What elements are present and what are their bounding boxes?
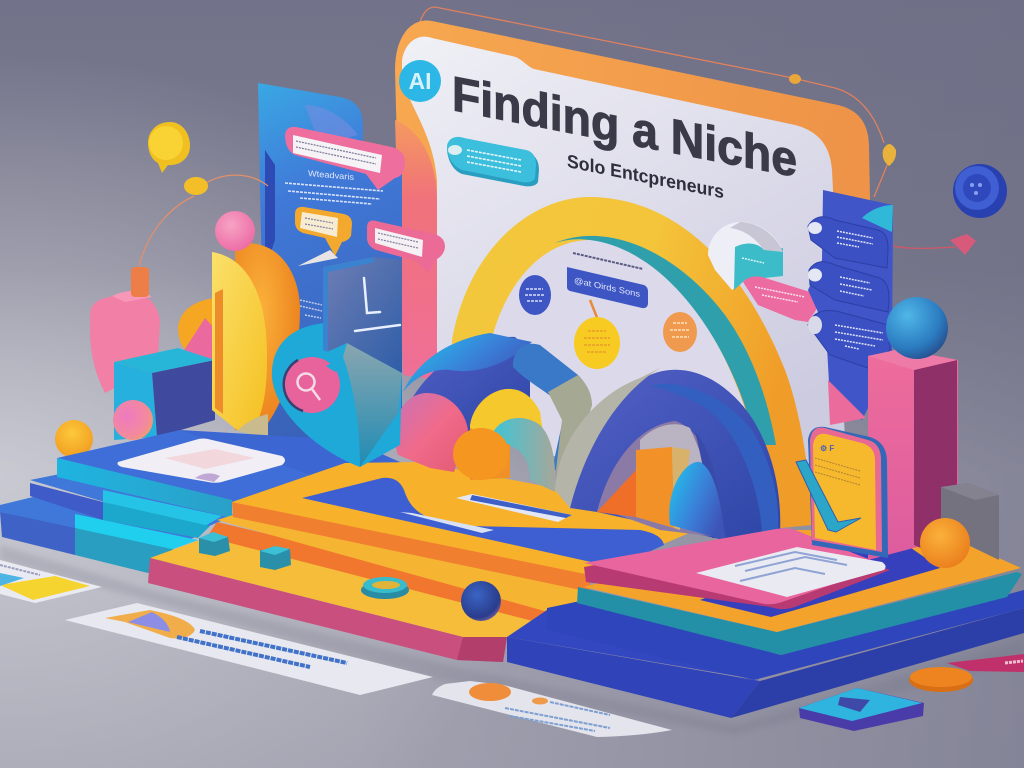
middle step — [30, 474, 235, 538]
subtitle: Solo Entcpreneurs — [567, 150, 724, 202]
connector line with nodes — [420, 7, 896, 197]
pink speech bubble top — [285, 127, 405, 190]
note icon: ⚙ F — [820, 444, 834, 453]
pink speech bubble right — [367, 221, 445, 273]
orange cylinder — [453, 428, 510, 480]
arch white interior — [490, 240, 770, 510]
arch note (illegible in the reference) — [573, 253, 643, 269]
floor card banner — [65, 603, 433, 695]
cyan callout — [447, 137, 539, 186]
cyan dome — [669, 462, 725, 540]
orange circle — [663, 312, 697, 352]
orange ball — [55, 420, 93, 458]
bottom yellow tier — [150, 535, 545, 637]
orange box — [597, 447, 690, 530]
pink ball — [113, 400, 153, 440]
yellow chat icon — [148, 122, 190, 173]
white note card — [118, 438, 285, 483]
orange sphere — [920, 518, 970, 568]
blue label — [567, 267, 648, 308]
blue tube — [513, 344, 592, 470]
yellow note with check mark — [796, 427, 888, 558]
teal arch — [490, 418, 555, 492]
gray block — [941, 483, 999, 560]
teal token two — [260, 546, 291, 570]
blue button — [953, 164, 1007, 218]
teal token three — [361, 577, 409, 599]
blue bubble two — [808, 262, 889, 312]
pink front face — [148, 558, 507, 662]
floor shadow — [0, 545, 1024, 735]
cyan wave — [403, 333, 532, 392]
top step — [57, 430, 400, 518]
bottom step — [0, 497, 200, 573]
pink bubble — [743, 277, 817, 322]
blue bubble one — [808, 217, 888, 268]
pink tablet — [584, 528, 890, 609]
panel heading: Wteadvaris — [308, 168, 354, 182]
right platform stack — [507, 528, 1024, 718]
blue bubble three — [808, 311, 890, 368]
blue back arch — [403, 337, 530, 440]
teal slab — [577, 572, 1022, 655]
white sheet — [696, 547, 886, 597]
teal token one — [199, 532, 230, 556]
note lines — [815, 458, 860, 485]
wave white label — [456, 494, 572, 522]
title: Finding a Niche — [452, 66, 797, 188]
cube — [114, 348, 215, 440]
left blue platform stack — [0, 430, 400, 573]
board frame — [395, 20, 870, 420]
check mark — [796, 460, 861, 532]
glowing L box with search heart — [272, 257, 402, 467]
teal facet — [343, 343, 402, 467]
arches group — [395, 333, 780, 540]
search badge — [284, 357, 342, 413]
white and teal bubble — [708, 222, 783, 290]
pink dome — [395, 393, 468, 472]
mid blue slab — [547, 590, 1024, 680]
blue sphere — [886, 297, 948, 359]
floor card lower — [432, 681, 672, 737]
yellow circle — [574, 317, 620, 369]
lower text lines — [300, 300, 322, 318]
pink ball top — [215, 211, 255, 251]
AI badge: AI — [408, 68, 432, 94]
blue circle — [519, 275, 551, 315]
teal inner band — [555, 236, 776, 445]
board white sheet — [402, 37, 845, 480]
yellow dome — [470, 389, 545, 445]
cyan heart — [272, 323, 402, 467]
top yellow surface — [232, 462, 720, 575]
centre platform — [148, 462, 720, 662]
lower orange riser — [207, 522, 548, 625]
panel text lines — [285, 183, 383, 204]
glowing L letter — [355, 278, 400, 331]
yellow speech bubble — [295, 207, 352, 256]
AI badge — [399, 60, 441, 102]
middle yellow tier — [217, 515, 590, 612]
blue wave sheet — [302, 478, 664, 566]
right blue panel — [808, 190, 893, 425]
upper orange riser — [232, 502, 590, 592]
arch opening — [597, 421, 726, 538]
floor disc and ribbon — [909, 654, 1024, 692]
big blue arch — [555, 367, 780, 540]
tall pink block — [868, 349, 958, 560]
orange slab top — [584, 530, 1021, 632]
board pink strip — [395, 120, 437, 380]
connector — [590, 300, 598, 320]
wave white strip — [400, 512, 494, 533]
banner text lines (illegible in the reference) — [177, 631, 347, 667]
yellow arch — [452, 197, 812, 530]
floor tablet — [799, 688, 924, 731]
blue label: @at Oirds Sons — [574, 275, 640, 299]
left content panel — [258, 83, 402, 440]
bottom blue slab — [507, 608, 1024, 718]
banner icon — [105, 610, 195, 638]
half cylinder orange — [235, 243, 300, 432]
blue inset — [700, 530, 940, 617]
line from canister — [139, 196, 194, 266]
right arrow and button — [893, 164, 1007, 255]
floor card left — [0, 560, 102, 603]
decorative left objects — [55, 122, 300, 458]
half cylinder yellow — [212, 252, 267, 430]
L box — [323, 257, 402, 373]
main board — [395, 20, 870, 530]
blue ball — [461, 581, 501, 621]
orange slit — [215, 289, 223, 414]
pink canister — [90, 267, 160, 393]
orange blob — [178, 298, 230, 360]
